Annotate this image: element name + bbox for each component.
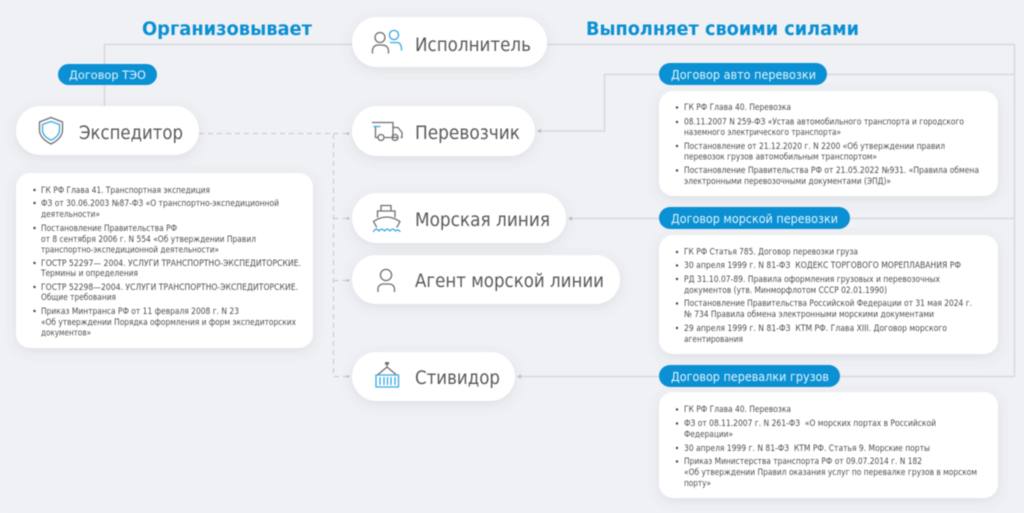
- panel: auto contract documents: [659, 91, 998, 196]
- list: auto regulations: Постановление Правительства РФ от 21.05.2022 №931. «Правила обмена: [684, 166, 979, 176]
- dashed connectors: expeditor to performers: [199, 132, 350, 378]
- list: expeditor regulations: документов»: [41, 328, 91, 338]
- node: expeditor: Экспедитор: [79, 122, 183, 144]
- icon: ship: [374, 206, 400, 232]
- node: carrier: Перевозчик: [415, 122, 520, 144]
- node: sea line agent: [352, 255, 620, 304]
- tag: sea contract: Договор морской перевозки: [671, 211, 838, 226]
- list: transshipment regulations: ГК РФ Глава 40. Перевозка: [684, 405, 791, 415]
- tag: sea contract: [659, 207, 850, 229]
- list: sea regulations: № 734 Правила обмена электронными морскими документами: [684, 310, 934, 320]
- list: sea regulations: документов (утв. Минморфлотом СССР 02.01.1990): [684, 286, 887, 296]
- arrow: auto contract to carrier: [537, 74, 659, 133]
- node: executor: Исполнитель: [415, 34, 531, 56]
- tag: auto contract: [659, 63, 827, 85]
- list: expeditor regulations: Приказ Минтранса РФ от 11 февраля 2008 г. N 23: [41, 307, 239, 317]
- list: expeditor regulations: от 8 сентября 2006 г. N 554 «Об утверждении Правил: [41, 235, 256, 245]
- node: sea line agent: Агент морской линии: [415, 270, 604, 292]
- icon: truck: [372, 122, 402, 140]
- list: auto regulations: [676, 103, 979, 187]
- list: sea regulations: РД 31.10.07-89. Правила оформления грузовых и перевозочных: [684, 275, 940, 285]
- icon: person: [378, 269, 394, 292]
- list: auto regulations: 08.11.2007 N 259-ФЗ «Устав автомобильного транспорта и городского: [684, 118, 964, 128]
- panel: transshipment documents: [659, 392, 998, 498]
- arrow: sea contract to sea line: [568, 216, 659, 221]
- tag: TEO contract: [58, 64, 157, 85]
- list: expeditor regulations: транспортно-экспедиционной деятельности»: [41, 246, 219, 256]
- list: expeditor regulations: деятельности»: [41, 210, 100, 220]
- list: expeditor regulations: ГК РФ Глава 41. Транспортная экспедиция: [41, 186, 210, 196]
- heading: performs by own forces: Выполняет своими силами: [586, 18, 859, 40]
- list: expeditor regulations: Термины и определения: [40, 269, 138, 279]
- node: executor: [352, 17, 547, 67]
- icon: shield: [40, 118, 62, 144]
- list: expeditor regulations: «Об утверждении Порядка оформления и форм экспедиторских: [41, 318, 296, 328]
- list: transshipment regulations: Федерации»: [684, 430, 733, 440]
- list: transshipment regulations: [676, 405, 977, 489]
- list: expeditor regulations: Общие требования: [41, 293, 116, 303]
- node: sea line: [352, 193, 566, 243]
- list: sea regulations: ГК РФ Статья 785. Договор перевозки груза: [684, 248, 858, 258]
- list: auto regulations: электронными перевозочными документами (ЭПД)»: [684, 177, 891, 187]
- node: expeditor: [16, 106, 199, 155]
- list: sea regulations: 29 апреля 1999 г. N 81-ФЗ КТМ РФ. Глава XIII. Договор морского: [684, 324, 947, 334]
- connector: expeditor to executor: [104, 44, 352, 106]
- icon: container on hook: [376, 362, 398, 387]
- tag: TEO contract: Договор ТЭО: [69, 68, 146, 82]
- list: sea regulations: [676, 248, 972, 345]
- node: stevedore: Стивидор: [415, 367, 500, 389]
- connector: executor to contracts bus: [547, 44, 1014, 376]
- list: transshipment regulations: «Об утверждении Правил оказания услуг по перевалке грузов в морском: [684, 468, 977, 478]
- list: expeditor regulations: Постановление Правительства РФ: [41, 224, 177, 234]
- tag: transshipment contract: [659, 365, 840, 387]
- heading: organizes: Организовывает: [142, 18, 312, 40]
- arrow: transshipment contract to stevedore: [517, 374, 659, 379]
- list: auto regulations: Постановление от 21.12.2020 г. N 2200 «Об утверждении правил: [684, 142, 945, 152]
- node: stevedore: [352, 352, 515, 401]
- list: expeditor regulations: [33, 186, 301, 338]
- list: transshipment regulations: 30 апреля 1999 г. N 81-ФЗ КТМ РФ. Статья 9. Морские порты: [684, 444, 930, 454]
- node: carrier: [352, 106, 535, 156]
- list: expeditor regulations: ГОСТР 52298—2004. УСЛУГИ ТРАНСПОРТНО-ЭКСПЕДИТОРСКИЕ.: [41, 283, 298, 293]
- tag: auto contract: Договор авто перевозки: [671, 67, 816, 82]
- tag: transshipment contract: Договор перевалки грузов: [671, 369, 829, 384]
- list: transshipment regulations: порту»: [684, 479, 711, 489]
- list: expeditor regulations: ФЗ от 30.06.2003 №87-ФЗ «О транспортно-экспедиционной: [41, 199, 279, 209]
- list: auto regulations: наземного электрического транспорта»: [684, 128, 841, 138]
- list: auto regulations: ГК РФ Глава 40. Перевозка: [684, 103, 791, 113]
- list: sea regulations: Постановление Правительства Российской Федерации от 31 мая 2024 г.: [684, 299, 972, 309]
- list: expeditor regulations: ГОСТР 52297— 2004. УСЛУГИ ТРАНСПОРТНО-ЭКСПЕДИТОРСКИЕ.: [41, 259, 301, 269]
- list: auto regulations: перевозок грузов автомобильным транспортом»: [684, 152, 877, 162]
- list: transshipment regulations: Приказ Министерства транспорта РФ от 09.07.2014 г. N 182: [684, 457, 922, 467]
- panel: sea contract documents: [659, 235, 998, 354]
- panel: expeditor documents: [16, 173, 313, 348]
- node: sea line: Морская линия: [415, 209, 550, 231]
- list: transshipment regulations: ФЗ от 08.11.2007 г. N 261-ФЗ «О морских портах в Российской: [684, 419, 936, 429]
- list: sea regulations: агентирования: [684, 335, 743, 345]
- list: sea regulations: 30 апреля 1999 г. N 81-ФЗ КОДЕКС ТОРГОВОГО МОРЕПЛАВАНИЯ РФ: [684, 261, 961, 271]
- icon: two people: [372, 30, 402, 53]
